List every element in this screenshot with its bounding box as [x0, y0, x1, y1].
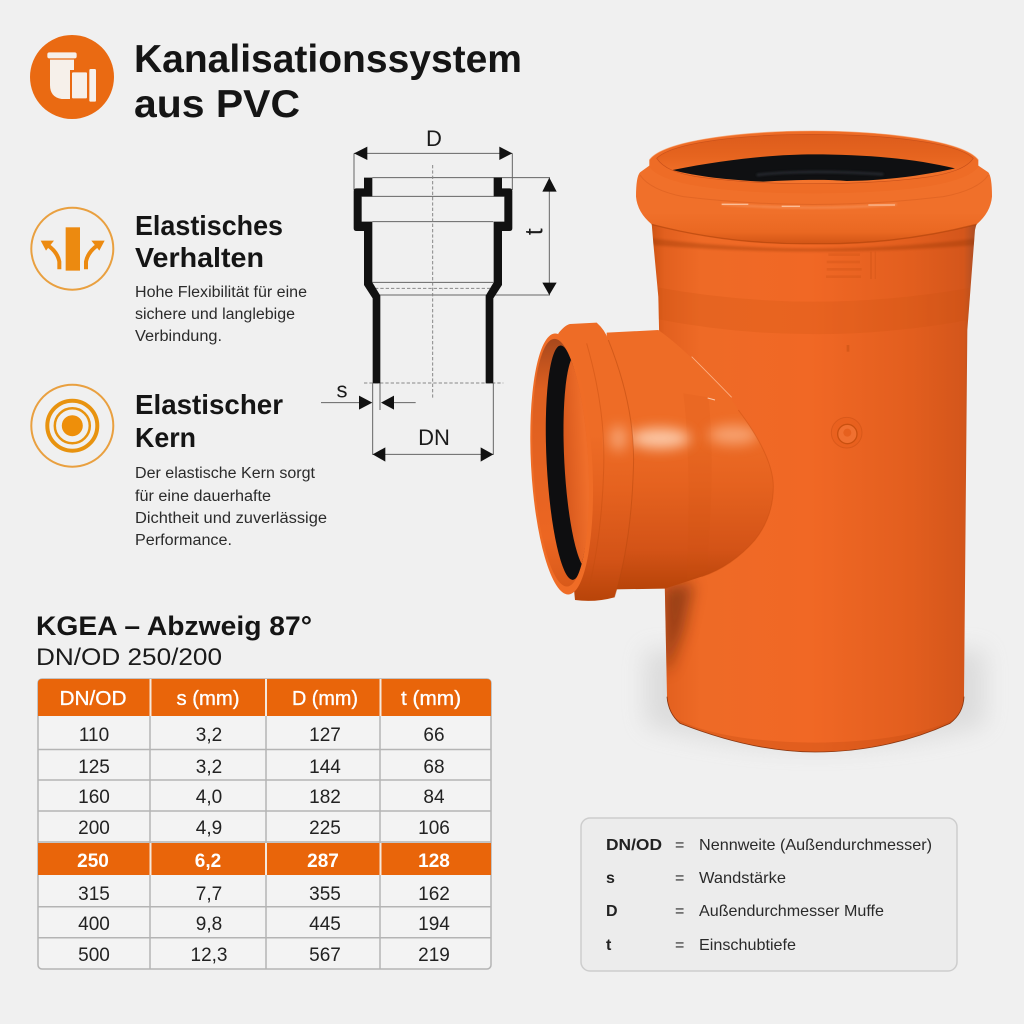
legend: D: Außendurchmesser Muffe	[699, 903, 884, 920]
table row 125: 144	[309, 757, 341, 778]
table row 160: 182	[309, 787, 341, 808]
legend panel	[581, 818, 957, 971]
injection point	[831, 417, 862, 448]
table row 250 highlighted: 287	[307, 851, 339, 872]
side branch	[524, 323, 773, 601]
branch opening	[530, 334, 593, 594]
title	[134, 38, 522, 126]
label: s: s	[336, 377, 347, 402]
table row 160: 160	[78, 787, 110, 808]
table row 315: 355	[309, 884, 341, 905]
icon: pipe fittings badge	[30, 35, 114, 119]
feature: Elastisches Verhalten: Verbindung.	[135, 328, 222, 345]
legend: D: =	[675, 903, 684, 920]
drawing: left wall	[354, 178, 380, 383]
table row 110: 66	[423, 725, 445, 746]
embossed marking	[826, 252, 876, 279]
feature: Elastischer Kern: Kern	[135, 422, 196, 453]
feature: Elastischer Kern: Der elastische Kern sorgt	[135, 465, 316, 482]
legend: DN/OD: =	[675, 837, 684, 854]
label: D: D	[426, 126, 442, 151]
table row 200: 200	[78, 818, 110, 839]
legend: DN/OD: DN/OD	[606, 837, 662, 854]
legend: t: t	[606, 937, 612, 954]
table heading: DN/OD 250/200	[36, 644, 222, 671]
legend: s: Wandstärke	[699, 870, 786, 887]
table heading: KGEA – Abzweig 87°	[36, 611, 312, 641]
legend: s: s	[606, 870, 615, 887]
arrows: dimension heads	[354, 147, 557, 462]
table row 500	[78, 945, 450, 966]
branch collar	[558, 323, 634, 601]
legend: t: =	[675, 937, 684, 954]
table header row: DN/OD	[60, 688, 126, 710]
table row 250 highlighted: 250	[77, 851, 109, 872]
legend: s: =	[675, 870, 684, 887]
table row 315	[78, 884, 450, 905]
feature: Elastisches Verhalten	[135, 210, 307, 345]
title: aus PVC	[134, 83, 300, 126]
technical drawing: socket cross-section	[321, 126, 557, 462]
table row 315: 162	[418, 884, 450, 905]
legend: D	[606, 903, 884, 920]
pipe body	[652, 223, 977, 752]
legend: D: D	[606, 903, 618, 920]
legend: DN/OD: Nennweite (Außendurchmesser)	[699, 837, 932, 854]
table row 315: 7,7	[196, 884, 222, 905]
legend: t: Einschubtiefe	[699, 937, 796, 954]
floor shadow	[645, 650, 985, 748]
table: dimensions	[38, 679, 491, 969]
table row 200: 225	[309, 818, 341, 839]
table row 500: 12,3	[191, 945, 227, 966]
table row 400: 400	[78, 914, 110, 935]
label: DN: DN	[418, 425, 450, 450]
table row 160: 84	[423, 787, 445, 808]
table row 110: 127	[309, 725, 341, 746]
feature: Elastisches Verhalten: Hohe Flexibilität für eine	[135, 284, 307, 301]
feature: Elastischer Kern: für eine dauerhafte	[135, 488, 271, 505]
table header row	[38, 679, 491, 716]
top socket	[636, 131, 992, 244]
table row 125	[78, 757, 445, 778]
feature: Elastisches Verhalten: Verhalten	[135, 242, 264, 273]
table row 400: 9,8	[196, 914, 222, 935]
branch neck and cone	[607, 330, 773, 589]
table header row: t (mm)	[401, 688, 461, 710]
legend: s	[606, 870, 786, 887]
table header row: D (mm)	[292, 688, 358, 710]
table row 400: 194	[418, 914, 450, 935]
feature: Elastischer Kern: Elastischer	[135, 389, 283, 420]
table row 200	[78, 818, 450, 839]
table row 110	[79, 725, 445, 746]
table row 400: 445	[309, 914, 341, 935]
table header row: s (mm)	[176, 688, 240, 710]
feature: Elastischer Kern	[135, 389, 327, 549]
rubber seal	[673, 154, 955, 182]
table row 500: 567	[309, 945, 341, 966]
table row 200: 106	[418, 818, 450, 839]
feature: Elastisches Verhalten: sichere und langlebige	[135, 306, 295, 323]
title: Kanalisationssystem	[134, 38, 522, 81]
table row 500: 500	[78, 945, 110, 966]
table row 250 highlighted: 6,2	[195, 851, 221, 872]
table row 250 highlighted	[38, 843, 491, 875]
table row 500: 219	[418, 945, 450, 966]
legend: t	[606, 937, 796, 954]
table row 200: 4,9	[196, 818, 222, 839]
table row 110: 110	[79, 725, 109, 746]
feature: Elastisches Verhalten: Elastisches	[135, 210, 283, 241]
table row 125: 68	[423, 757, 445, 778]
product photo: orange PVC branch fitting	[524, 131, 992, 752]
drawing: right wall	[486, 178, 512, 383]
table row 400	[78, 914, 450, 935]
table row 125: 125	[78, 757, 110, 778]
collar highlights	[722, 204, 897, 208]
table row 125: 3,2	[196, 757, 222, 778]
feature: Elastischer Kern: Performance.	[135, 532, 232, 549]
icon: elastic behaviour	[31, 208, 113, 290]
label: t: t	[521, 228, 548, 235]
rim	[649, 131, 978, 193]
feature: Elastischer Kern: Dichtheit und zuverlässige	[135, 510, 327, 527]
table row 250 highlighted: 128	[418, 851, 450, 872]
table row 110: 3,2	[196, 725, 222, 746]
icon: elastic core	[31, 385, 113, 467]
table row 315: 315	[78, 884, 110, 905]
table row 160: 4,0	[196, 787, 222, 808]
table row 160	[78, 787, 445, 808]
table heading	[36, 611, 312, 671]
